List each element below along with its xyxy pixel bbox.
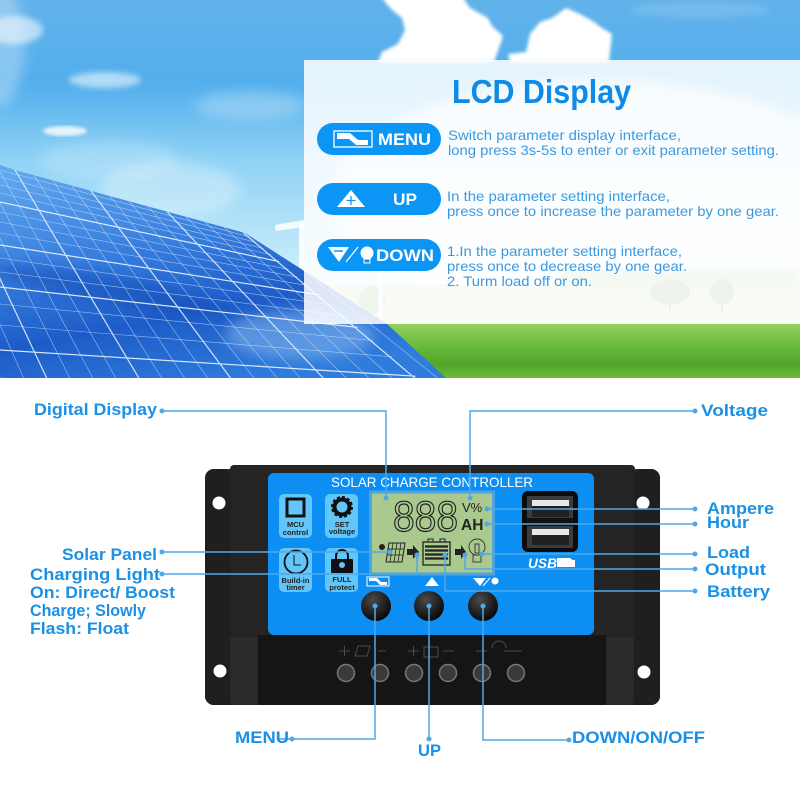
icon: output arrow xyxy=(455,545,466,559)
DOWN button row xyxy=(317,239,687,289)
label: Load: Load xyxy=(707,543,750,562)
label: MENU: MENU xyxy=(235,728,289,747)
LCD digits: 888 xyxy=(393,493,458,541)
UP description: press once to increase the parameter by one gear. xyxy=(447,203,779,219)
callout labels xyxy=(30,400,774,760)
DOWN pill xyxy=(317,239,441,271)
cumulus right xyxy=(508,8,612,62)
DOWN description: 1.In the parameter setting interface, xyxy=(447,243,682,259)
label: Ampere: Ampere xyxy=(707,499,774,518)
USB logo: USB xyxy=(528,555,557,571)
icon: Build-in timer: Build-in xyxy=(282,576,310,585)
USB logo xyxy=(528,555,575,571)
icon: sun and solar module xyxy=(379,543,405,562)
clouds xyxy=(0,0,800,224)
icon: charge arrow xyxy=(407,545,419,559)
sky xyxy=(0,0,800,268)
distant field and trees xyxy=(327,272,800,324)
solar panel xyxy=(0,165,446,378)
UP pill: UP xyxy=(393,190,417,209)
label: Battery: Battery xyxy=(707,582,771,601)
LCD unit AH: AH xyxy=(461,517,483,534)
label: Output: Output xyxy=(705,560,766,579)
label: DOWN/ON/OFF: DOWN/ON/OFF xyxy=(572,728,705,747)
UP description: In the parameter setting interface, xyxy=(447,188,670,204)
cumulus left xyxy=(378,0,503,62)
UP button xyxy=(414,591,444,621)
terminal symbols xyxy=(339,641,522,657)
label: charging light modes: Charge; Slowly xyxy=(30,601,147,620)
USB ports xyxy=(522,491,578,552)
icon: load bulb xyxy=(469,539,485,562)
hero photo: sky, solar panel and grass xyxy=(0,0,800,398)
label: charging light modes: Flash: Float xyxy=(30,619,129,638)
DOWN description: press once to decrease by one gear. xyxy=(447,258,687,274)
label: Digital Display: Digital Display xyxy=(34,400,158,419)
label: Voltage: Voltage xyxy=(701,401,768,420)
icon: SET voltage xyxy=(325,494,358,538)
MENU pill: MENU xyxy=(378,130,431,149)
label: Charging Light: Charging Light xyxy=(30,565,160,584)
callout dots xyxy=(160,408,698,742)
MENU button xyxy=(361,591,391,621)
MENU description: Switch parameter display interface, xyxy=(448,127,681,143)
icon: Build-in timer: timer xyxy=(286,583,305,592)
LCD screen xyxy=(370,492,494,574)
MENU pill xyxy=(317,123,441,155)
label: UP: UP xyxy=(418,741,441,760)
LCD unit V%: V% xyxy=(462,500,483,515)
icon: SET voltage: SET xyxy=(335,520,350,529)
terminal screws xyxy=(338,664,524,682)
grass strip xyxy=(380,324,800,378)
DOWN key icon xyxy=(473,578,498,586)
callout leader lines xyxy=(162,411,695,740)
DOWN description: 2. Turm load off or on. xyxy=(447,273,592,289)
MENU description: long press 3s-5s to enter or exit parameter setting. xyxy=(448,142,779,158)
label: Solar Panel: Solar Panel xyxy=(62,545,157,564)
panel: LCD display translucent card xyxy=(304,60,800,324)
blue face plate xyxy=(268,473,594,635)
solar charge controller device xyxy=(205,465,660,705)
MENU button row xyxy=(317,123,779,158)
icon: Build-in timer xyxy=(279,548,312,592)
label: Hour: Hour xyxy=(707,513,749,532)
DOWN button xyxy=(468,591,498,621)
icon: MCU control xyxy=(279,494,312,538)
icon: MCU control: MCU xyxy=(287,520,304,529)
controller casing xyxy=(205,465,660,705)
icon: MCU control: control xyxy=(283,528,308,537)
DOWN pill: DOWN xyxy=(376,246,434,265)
UP pill xyxy=(317,183,441,215)
face plate title: SOLAR CHARGE CONTROLLER xyxy=(331,474,533,490)
wind turbine xyxy=(275,220,383,326)
label: charging light modes: On: Direct/ Boost xyxy=(30,583,175,602)
icon: FULL protect xyxy=(325,548,358,592)
icon: battery xyxy=(423,539,450,565)
UP button row xyxy=(317,183,779,219)
icon: FULL protect: FULL xyxy=(332,575,352,584)
MENU key icon xyxy=(367,577,389,586)
UP key icon xyxy=(425,577,439,586)
icon: SET voltage: voltage xyxy=(329,527,355,536)
heading: LCD Display: LCD Display xyxy=(452,73,632,110)
icon: FULL protect: protect xyxy=(329,583,355,592)
